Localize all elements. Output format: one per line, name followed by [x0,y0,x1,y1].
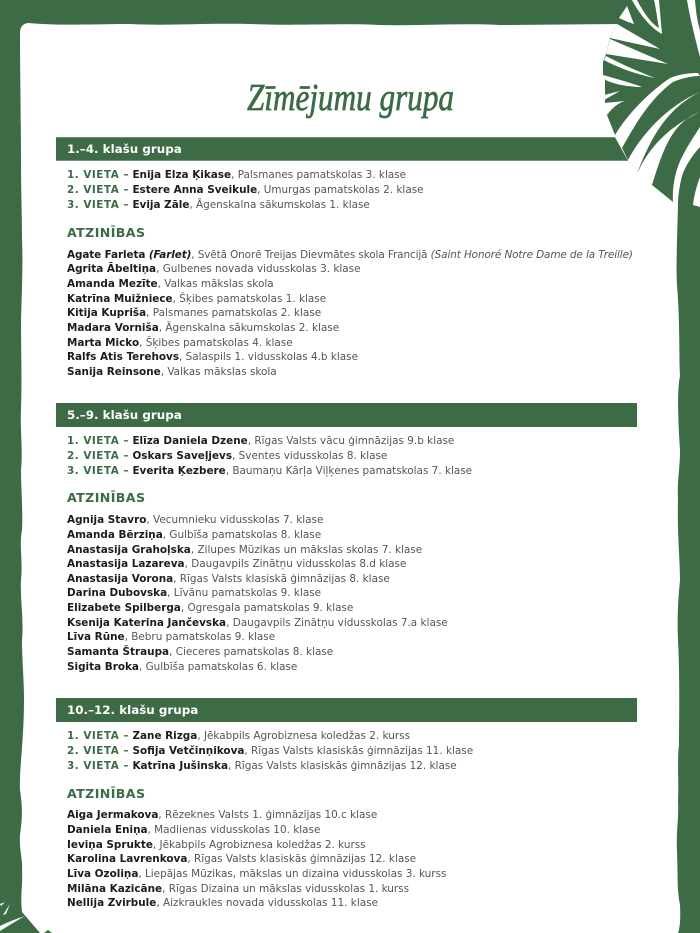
text: Agrita Ābeltiņa, Gulbenes novada vidusskolas 3. klase [67,263,361,275]
section heading: 1.–4. klašu grupa [67,142,182,156]
subheading: ATZINĪBAS [67,224,145,240]
text: Ieviņa Sprukte, Jēkabpils Agrobiznesa koledžas 2. kurss [67,839,366,851]
subheading: ATZINĪBAS [67,786,145,800]
text: 1. VIETA – Elīza Daniela Dzene, Rīgas Valsts vācu ģimnāzijas 9.b klase [67,435,454,447]
text: Agnija Stavro, Vecumnieku vidusskolas 7. klase [67,514,323,526]
leaf: bottom left [0,902,52,933]
text: Milāna Kazicāne, Rīgas Dizaina un mākslas vidusskolas 1. kurss [67,883,409,895]
text: Madara Vorniša, Āgenskalna sākumskolas 2. klase [67,322,339,334]
section heading [56,403,637,427]
text: Līva Rūne, Bebru pamatskolas 9. klase [67,631,275,643]
text: Marta Micko, Šķibes pamatskolas 4. klase [67,337,293,349]
leaf: top right [603,0,700,222]
text: Daniela Eniņa, Madlienas vidusskolas 10. klase [67,824,320,836]
text: Samanta Štraupa, Cieceres pamatskolas 8. klase [67,646,333,658]
text: Agate Farleta (Farlet), Svētā Onorē Treijas Dievmātes skola Francijā (Saint Honoré Notre Dame de la Treille) [67,249,633,261]
section heading [56,137,628,161]
text: Anastasija Lazareva, Daugavpils Zinātņu vidusskolas 8.d klase [67,558,406,570]
text: Anastasija Grahoļska, Zilupes Mūzikas un mākslas skolas 7. klase [67,544,422,556]
text: Karolina Lavrenkova, Rīgas Valsts klasiskās ģimnāzijas 12. klase [67,853,416,865]
text: Katrīna Muižniece, Šķibes pamatskolas 1. klase [67,293,326,305]
subheading: ATZINĪBAS [67,490,145,504]
text: Amanda Mezīte, Valkas mākslas skola [67,278,274,290]
text: 2. VIETA – Estere Anna Sveikule, Umurgas pamatskolas 2. klase [67,184,424,196]
text: Nellija Zvirbule, Aizkraukles novada vidusskolas 11. klase [67,897,378,909]
text: 3. VIETA – Katrīna Jušinska, Rīgas Valsts klasiskās ģimnāzijas 12. klase [67,760,457,772]
section heading: 10.–12. klašu grupa [67,703,198,717]
text: 3. VIETA – Everita Ķezbere, Baumaņu Kārļa Viļķenes pamatskolas 7. klase [67,465,472,477]
text: 3. VIETA – Evija Zāle, Āgenskalna sākumskolas 1. klase [67,199,370,211]
text: 1. VIETA – Enija Elza Ķikase, Palsmanes pamatskolas 3. klase [67,169,406,181]
text: 2. VIETA – Sofija Vetčinņikova, Rīgas Valsts klasiskās ģimnāzijas 11. klase [67,745,473,757]
text: 1. VIETA – Zane Rizga, Jēkabpils Agrobiznesa koledžas 2. kurss [67,730,410,742]
section heading [56,698,637,722]
text: Ralfs Atis Terehovs, Salaspils 1. vidusskolas 4.b klase [67,351,358,363]
text: Sigita Broka, Gulbīša pamatskolas 6. klase [67,661,297,673]
text: Amanda Bērziņa, Gulbīša pamatskolas 8. klase [67,529,321,541]
text: Kitija Kupriša, Palsmanes pamatskolas 2. klase [67,307,321,319]
text: Anastasija Vorona, Rīgas Valsts klasiskā ģimnāzijas 8. klase [67,573,390,585]
text: Sanija Reinsone, Valkas mākslas skola [67,366,277,378]
text: 2. VIETA – Oskars Saveļjevs, Sventes vidusskolas 8. klase [67,450,387,462]
text: Aiga Jermakova, Rēzeknes Valsts 1. ģimnāzijas 10.c klase [67,809,377,821]
text: Elizabete Spilberga, Ogresgala pamatskolas 9. klase [67,602,353,614]
text: Līva Ozoliņa, Liepājas Mūzikas, mākslas un dizaina vidusskolas 3. kurss [67,868,446,880]
section heading: 5.–9. klašu grupa [67,408,182,422]
text: Ksenija Katerina Jančevska, Daugavpils Zinātņu vidusskolas 7.a klase [67,617,448,629]
text: Darina Dubovska, Līvānu pamatskolas 9. klase [67,587,321,599]
